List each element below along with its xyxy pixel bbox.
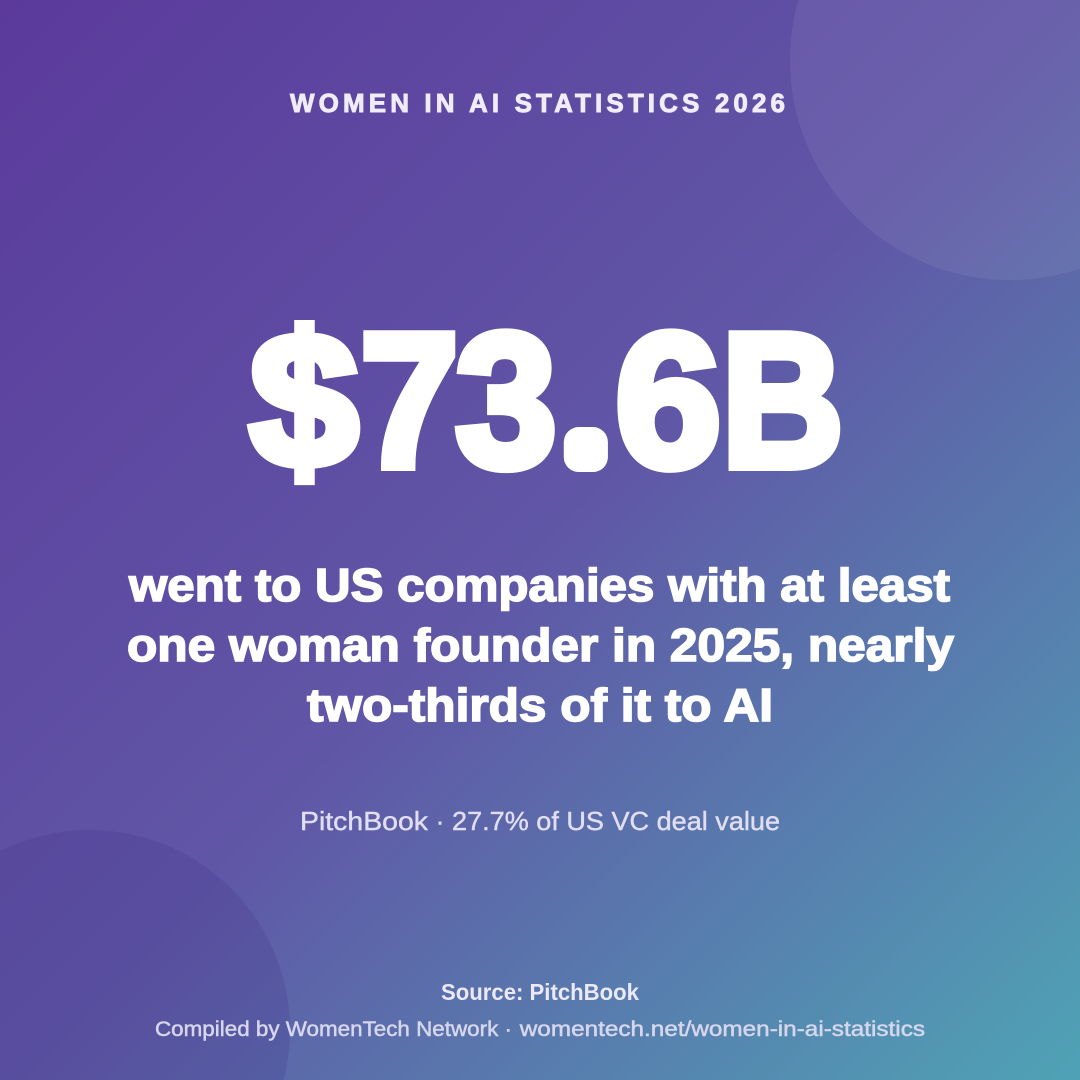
decorative circle: top right bbox=[790, 0, 1080, 280]
supporting detail: PitchBook bbox=[300, 806, 429, 836]
big number: B bbox=[722, 295, 844, 507]
credit line: womentech.net/women-in-ai-statistics bbox=[513, 1018, 925, 1041]
big number: 6 bbox=[615, 295, 721, 507]
title: WOMEN IN AI STATISTICS 2026 bbox=[290, 88, 785, 118]
big number: . bbox=[572, 367, 600, 479]
main statement bbox=[127, 559, 954, 731]
supporting detail: · 27.7% of US VC deal value bbox=[428, 806, 780, 836]
big number: 3 bbox=[456, 295, 557, 507]
statement line 3: two-thirds of it to AI bbox=[307, 679, 773, 731]
source: Source: PitchBook bbox=[441, 979, 639, 1005]
big number: $ bbox=[250, 295, 358, 507]
decorative circle: bottom left bbox=[0, 830, 290, 1080]
credit line: Compiled by WomenTech Network · bbox=[155, 1018, 512, 1041]
big number: 7 bbox=[360, 295, 458, 507]
statement line 1: went to US companies with at least bbox=[128, 559, 950, 611]
statement line 2: one woman founder in 2025, nearly bbox=[127, 619, 954, 671]
